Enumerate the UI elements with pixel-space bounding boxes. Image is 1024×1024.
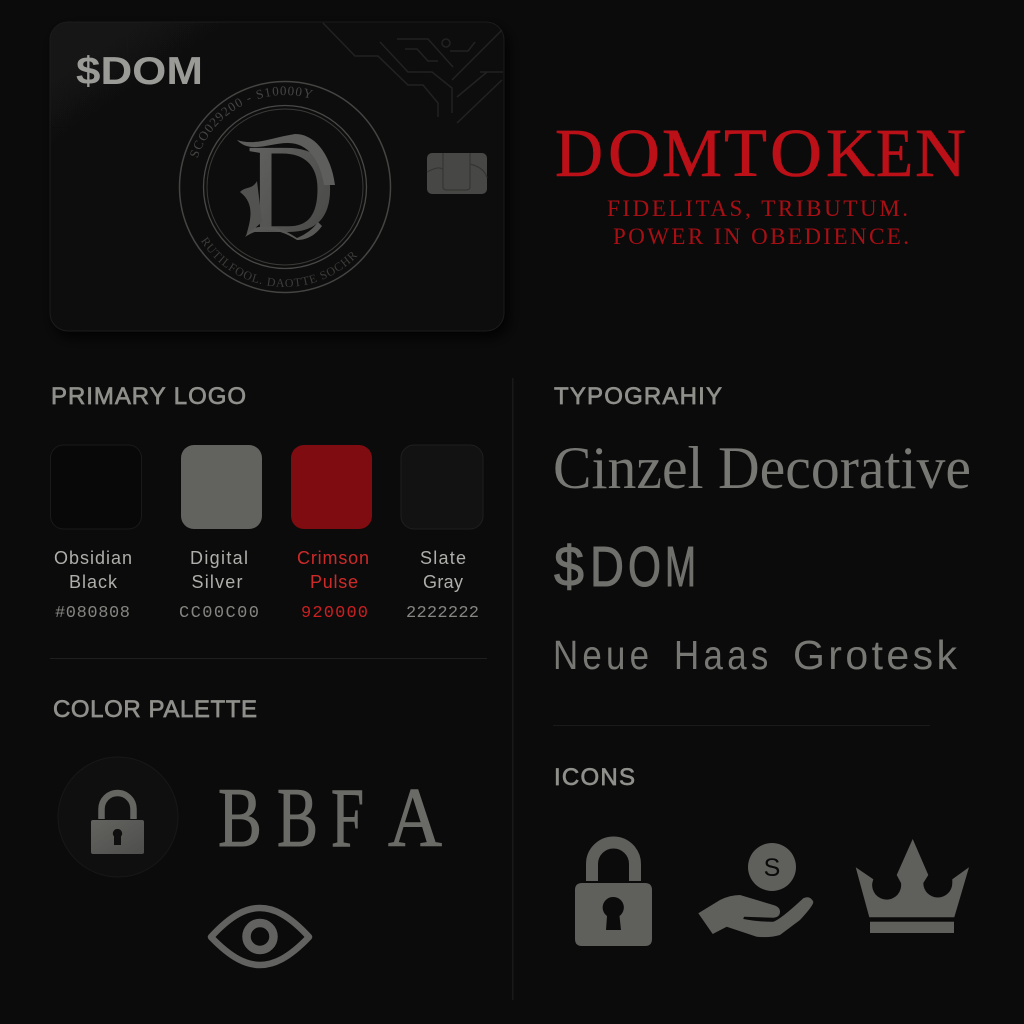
letter specimen BBF A: B xyxy=(218,771,262,865)
letter specimen BBF A: F xyxy=(331,771,364,865)
swatch label: Obsidian xyxy=(54,548,132,568)
vertical divider xyxy=(512,378,514,1000)
brand title: O xyxy=(608,115,660,191)
heading: color palette: COLOR PALETTE xyxy=(53,696,257,723)
swatch: crimson pulse xyxy=(291,445,372,623)
type sample: ticker: M xyxy=(665,535,696,599)
letter specimen BBF A: A xyxy=(388,771,442,865)
brand title: N xyxy=(915,115,966,191)
tagline: POWER IN OBEDIENCE. xyxy=(613,224,909,249)
ring text top: SCO029200 - S10000Y xyxy=(190,86,314,158)
type sample: ticker: D xyxy=(590,535,624,599)
icon: eye xyxy=(211,908,309,965)
swatch: digital silver xyxy=(179,445,262,623)
brand title: D xyxy=(555,115,603,191)
type sample: ticker xyxy=(554,535,696,599)
swatch label: Crimson xyxy=(297,548,369,568)
swatch label: Slate xyxy=(420,548,466,568)
icon: padlock xyxy=(575,842,652,946)
padlock body xyxy=(91,820,144,854)
brand title xyxy=(555,115,966,249)
icon: hand with coin xyxy=(698,843,813,937)
monogram D: D xyxy=(246,118,335,260)
swatch code: 920000 xyxy=(301,604,368,623)
type sample: display serif: Cinzel Decorative xyxy=(553,435,971,501)
left divider xyxy=(50,658,487,659)
type sample: ticker: O xyxy=(628,535,661,599)
heading: typography: TYPOGRAHIY xyxy=(554,383,722,410)
swatch label: Digital xyxy=(190,548,248,568)
swatch code: CC00C00 xyxy=(179,604,259,623)
ring text bottom: RUTILFOOL. DAOTTE SOCHR xyxy=(201,236,358,287)
swatch code: 2222222 xyxy=(406,604,479,623)
type sample: grotesk xyxy=(553,632,958,679)
swatch: obsidian black xyxy=(50,445,142,623)
tagline xyxy=(607,196,909,249)
type sample: grotesk: Grotesk xyxy=(793,632,958,678)
swatch: obsidian black: Black xyxy=(69,572,118,592)
type sample: ticker: $ xyxy=(554,535,584,599)
icon: crown xyxy=(856,839,969,933)
swatch code: #080808 xyxy=(55,604,130,623)
badge: padlock in circle xyxy=(58,757,178,877)
card chip xyxy=(427,153,487,194)
brand title: T xyxy=(724,115,767,191)
swatch: digital silver: Silver xyxy=(192,572,242,592)
card ticker: $DOM xyxy=(76,50,203,93)
letter specimen BBF A xyxy=(218,771,442,865)
brand title: K xyxy=(826,115,875,191)
type sample: grotesk: Neue xyxy=(553,633,649,679)
circuit lines xyxy=(323,23,503,123)
swatch: slate gray: Gray xyxy=(423,572,463,592)
heading: icons: ICONS xyxy=(554,764,635,791)
letter specimen BBF A: B xyxy=(277,771,318,865)
brand title: M xyxy=(662,115,722,191)
type sample: grotesk: Haas xyxy=(674,633,768,679)
brand title: E xyxy=(876,115,913,191)
tagline: FIDELITAS, TRIBUTUM. xyxy=(607,196,908,221)
seal emblem xyxy=(178,80,392,294)
swatch: crimson pulse: Pulse xyxy=(310,572,358,592)
padlock shackle xyxy=(102,793,134,819)
swatch: slate gray xyxy=(401,445,483,623)
brand title: O xyxy=(770,115,822,191)
panel: black card xyxy=(50,22,504,332)
right divider xyxy=(553,725,930,726)
heading: primary logo: PRIMARY LOGO xyxy=(51,383,246,410)
coin letter: S xyxy=(764,854,780,882)
hand xyxy=(698,895,813,937)
